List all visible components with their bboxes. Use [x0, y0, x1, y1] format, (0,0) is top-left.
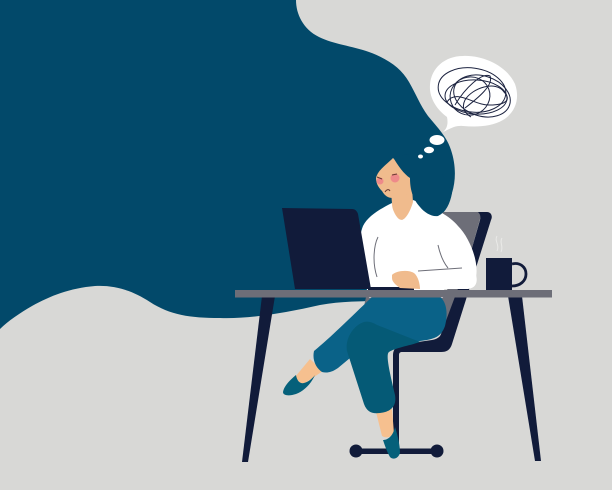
laptop	[282, 208, 414, 291]
shirt crease lines	[374, 237, 448, 277]
trousers: front leg	[347, 322, 420, 413]
coffee mug	[486, 236, 526, 290]
sleeve cuff and forearm	[418, 268, 477, 289]
face	[376, 158, 412, 198]
speech bubble with scribble	[430, 56, 517, 132]
scribble	[435, 63, 516, 124]
laptop base	[368, 287, 414, 291]
woman's torso: shirt	[360, 200, 477, 298]
mug body	[486, 258, 512, 290]
mug handle	[512, 264, 526, 286]
laptop screen	[282, 208, 371, 289]
sleeve crease	[418, 268, 462, 271]
neck	[391, 188, 413, 220]
thought dots	[418, 135, 444, 158]
steam	[496, 236, 502, 252]
chair frame	[393, 212, 492, 445]
chair	[350, 212, 492, 458]
chair base	[355, 448, 437, 454]
cheeks	[376, 178, 384, 184]
speech bubble body	[430, 56, 517, 132]
hand	[392, 271, 420, 289]
trousers: thigh and back leg	[313, 297, 447, 373]
hair: large flowing shape	[0, 0, 455, 329]
front leg: shin and shoe	[376, 408, 400, 459]
eyes, brows and mouth	[377, 174, 397, 192]
back leg: shin and shoe	[283, 359, 323, 395]
desk legs	[242, 296, 541, 462]
desk top	[235, 290, 552, 298]
chair back cushion	[360, 212, 482, 325]
front hair lock	[393, 150, 452, 216]
